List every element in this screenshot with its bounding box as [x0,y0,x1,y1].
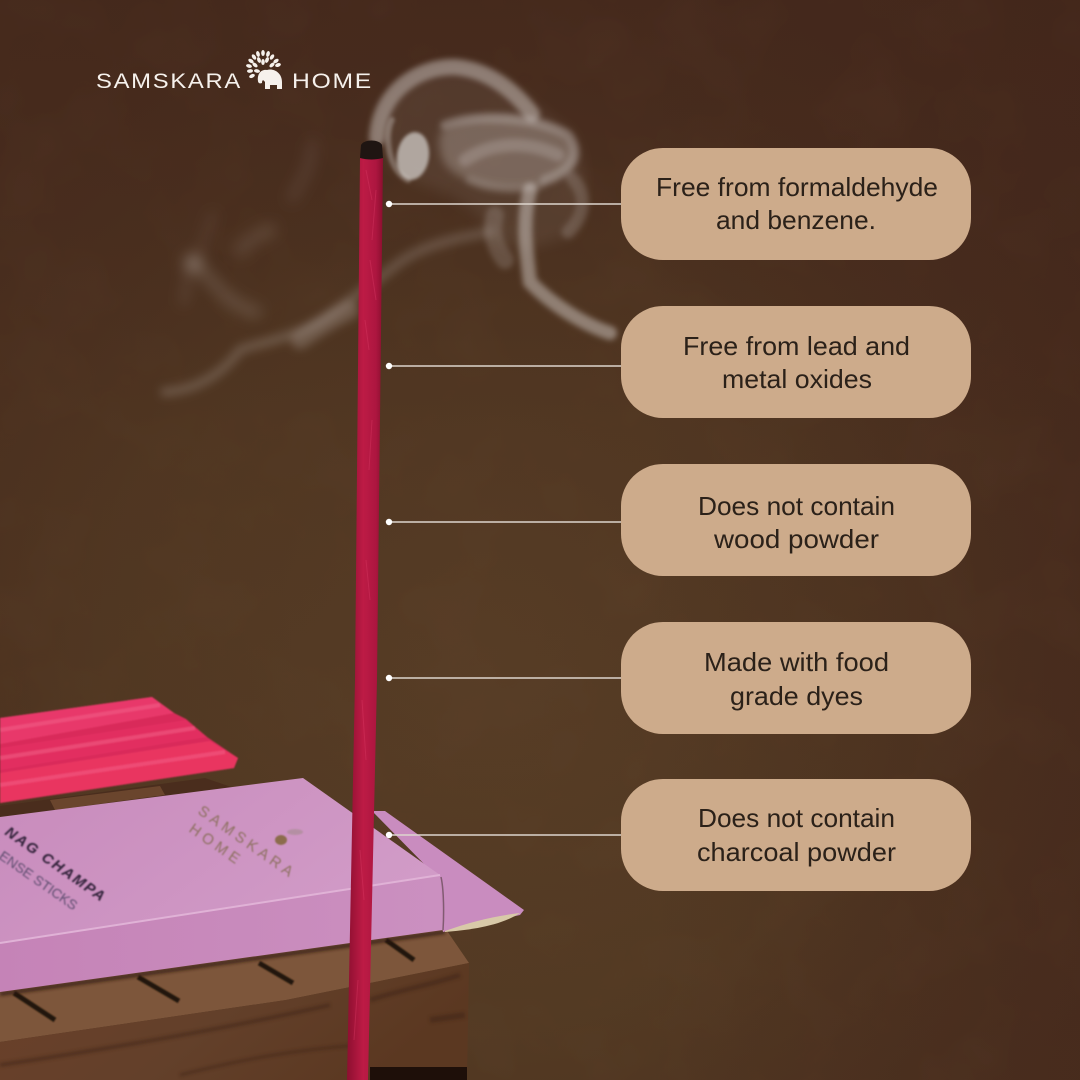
callout 2 [386,306,971,418]
incense stick [347,140,383,1080]
smoke: main plume [377,64,610,333]
box: fold highlight [0,875,440,943]
box: opened flap [372,811,524,932]
logo wordmark: SAMSKARA: SAMSKARA [96,70,242,93]
callout 1: Free from formaldehyde [656,172,938,202]
box: flap inner edge [445,913,520,932]
box: end edge shadow [441,877,444,930]
smoke: faint left wisps [183,145,312,312]
connector 2 [386,363,622,369]
callout 3: wood powder [713,524,879,554]
box: side face [0,875,443,992]
callout 2: metal oxides [722,364,872,394]
incense box [0,778,524,994]
smoke: tail [493,178,610,333]
callout 5: charcoal powder [697,837,896,867]
callout 5: Does not contain [698,803,895,833]
crate: dark opening [370,1067,467,1080]
smoke: curl blob [439,116,576,189]
box: brand icon [275,829,303,845]
callout 4 [386,622,971,734]
callout 4: grade dyes [730,681,863,711]
callout 1 [386,148,971,260]
box: top face [0,778,440,943]
connector 5 [386,832,622,838]
crate: back slats [0,778,240,830]
callout 4: Made with food [704,647,889,677]
connector 1 [386,201,622,207]
box: shadow under box [0,932,445,994]
wooden crate [0,778,469,1080]
pink sticks bundle [0,697,238,803]
box: brand label: SAMSKARA [195,802,296,881]
logo icon: tree and elephant [246,50,282,89]
crate: top surface [0,925,469,1042]
crate: front face [0,963,469,1080]
smoke: ring and bright lobe [388,120,432,182]
smoke: curl highlights [445,118,574,188]
stick: burnt tip [360,140,383,160]
smoke: upper arc [377,67,532,138]
callout 2: Free from lead and [683,331,910,361]
callout 3: Does not contain [698,491,895,521]
callout 1: and benzene. [716,205,876,235]
callout 5 [386,779,971,891]
box: product label: NAG CHAMPA [2,823,108,905]
logo [96,50,373,93]
logo wordmark: HOME: HOME [292,70,373,93]
connector 4 [386,675,622,681]
stick: fibre highlights [354,170,376,1040]
connector 3 [386,519,622,525]
box: brand label: HOME [186,820,243,868]
crate: slat gaps [14,940,414,1020]
stick: body [347,158,383,1080]
smoke: thin trail [165,232,490,392]
callout 3 [386,464,971,576]
smoke: haze behind curl [379,64,584,249]
